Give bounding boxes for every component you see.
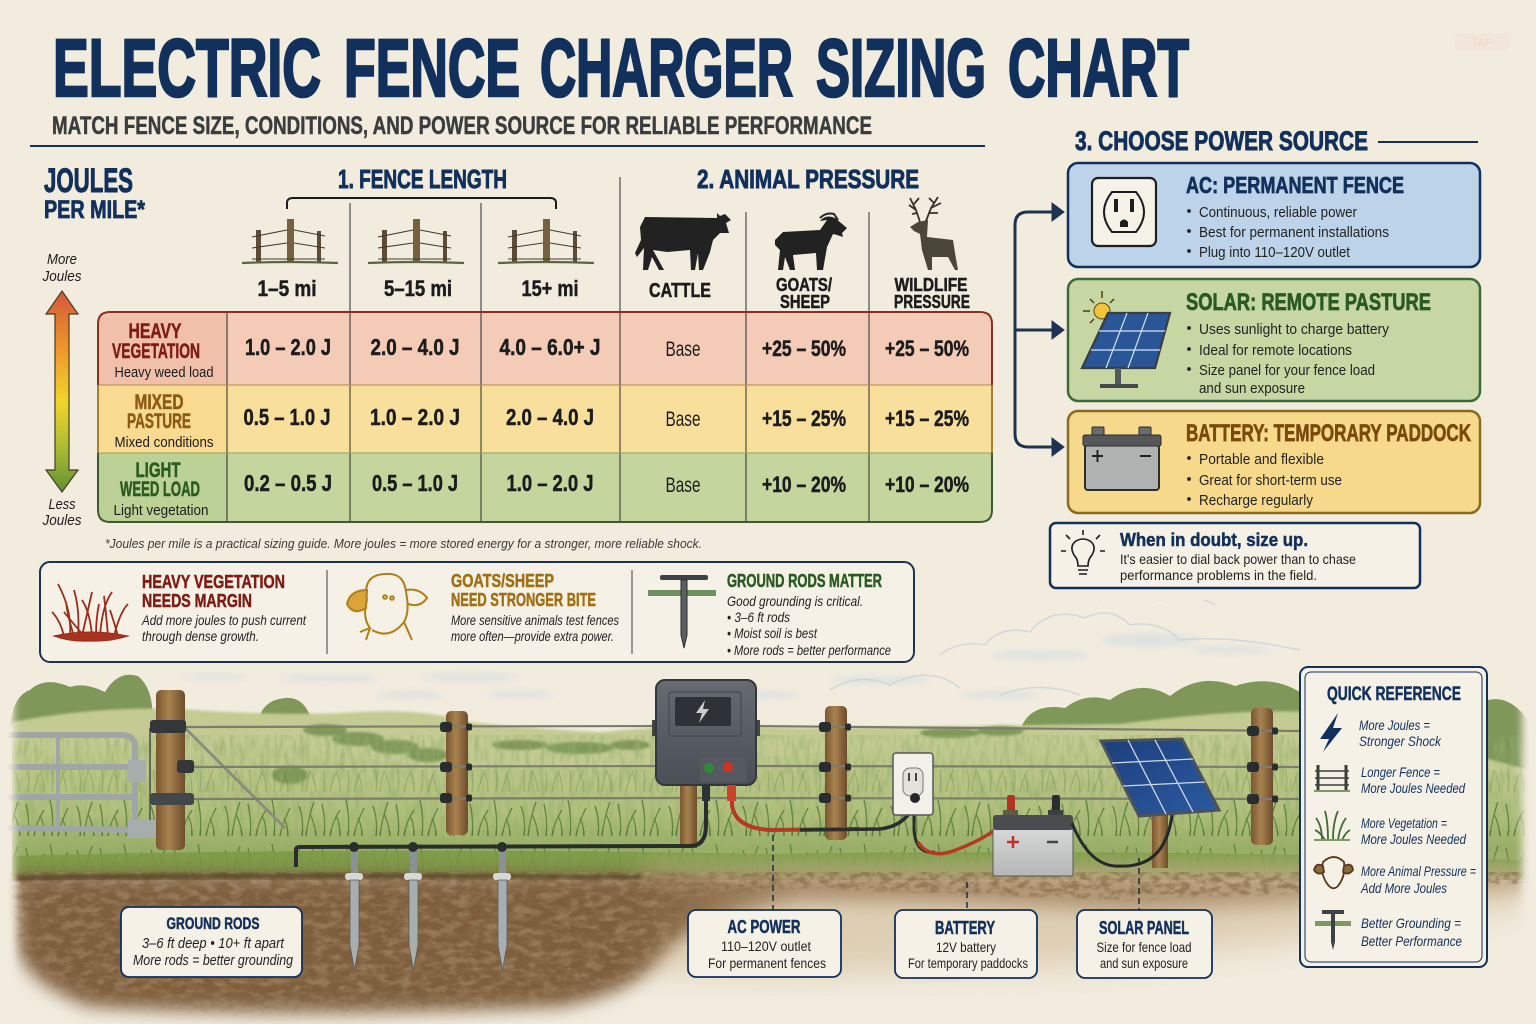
label: battery — [895, 910, 1037, 978]
panel: AC power: AC: PERMANENT FENCE — [1186, 172, 1404, 198]
row: light weed load — [114, 459, 969, 519]
icon: short fence — [242, 219, 338, 263]
panel: solar: Ideal for remote locations — [1199, 342, 1352, 359]
panel: quick reference: More Joules Needed — [1361, 780, 1466, 796]
row: heavy vegetation: +25 – 50% — [885, 336, 969, 361]
callout: when in doubt — [1050, 523, 1420, 588]
row: mixed pasture: 2.0 – 4.0 J — [506, 404, 594, 430]
label: solar panel — [1077, 910, 1212, 978]
panel: quick reference: More Vegetation = — [1361, 815, 1447, 831]
label: battery: BATTERY — [935, 918, 995, 938]
row: heavy vegetation: +25 – 50% — [762, 336, 846, 361]
arrows to power cards — [1015, 203, 1064, 456]
panel: quick reference: QUICK REFERENCE — [1327, 684, 1461, 705]
distant trees — [10, 674, 1528, 770]
ground rods — [345, 842, 511, 970]
icon: medium fence — [368, 219, 464, 263]
label: AC power — [688, 910, 841, 977]
panel: tips strip: NEEDS MARGIN — [142, 591, 252, 611]
panel: AC power — [1068, 163, 1480, 267]
left axis: joules per mile: Less — [48, 496, 76, 513]
row: heavy vegetation: 4.0 – 6.0+ J — [500, 334, 600, 360]
illustration: wall outlet — [893, 753, 933, 815]
ground wire — [294, 801, 708, 867]
icon: deer — [909, 197, 958, 270]
label: ground rods — [121, 907, 302, 977]
row: heavy vegetation: 2.0 – 4.0 J — [370, 334, 460, 360]
illustration: solar panel — [1072, 739, 1219, 866]
callout: when in doubt: It's easier to dial back power than to chase — [1120, 551, 1356, 567]
icon: light bulb — [1061, 530, 1105, 574]
panel: solar: and sun exposure — [1199, 380, 1305, 397]
title: SIZING — [816, 23, 986, 114]
left axis: joules per mile: More — [47, 251, 77, 268]
label: solar panel: SOLAR PANEL — [1099, 918, 1189, 938]
label: AC power: 110–120V outlet — [721, 938, 811, 954]
row: mixed pasture — [114, 391, 969, 451]
icon: goat — [775, 214, 847, 270]
left axis: joules per mile: JOULES — [44, 162, 133, 200]
gate — [8, 728, 156, 838]
panel: quick reference: More Joules = — [1359, 717, 1430, 733]
far hills — [12, 709, 1530, 880]
field — [12, 752, 1526, 880]
panel: tips strip: More sensitive animals test fences — [451, 612, 619, 628]
illustration: fence charger — [652, 680, 760, 801]
row: light weed load: 1.0 – 2.0 J — [506, 470, 594, 496]
fence brace — [185, 728, 285, 828]
row: mixed pasture: +15 – 25% — [762, 406, 846, 431]
header: animal pressure — [635, 164, 970, 312]
panel: quick reference: Longer Fence = — [1361, 764, 1440, 780]
row: heavy vegetation: Heavy weed load — [114, 364, 214, 381]
fence wires — [185, 726, 1300, 799]
header: fence length — [242, 164, 594, 301]
row: light weed load: +10 – 20% — [885, 472, 969, 497]
panel: tips strip — [40, 562, 914, 662]
scale arrow — [46, 291, 78, 492]
row: mixed pasture: +15 – 25% — [885, 406, 969, 431]
row: light weed load: 0.5 – 1.0 J — [372, 470, 458, 496]
panel: tips strip: • More rods = better performance — [727, 642, 891, 658]
row: light weed load: Base — [666, 474, 700, 497]
icon: sheep — [347, 574, 427, 640]
panel: quick reference: Better Performance — [1361, 933, 1462, 949]
faint watermark tag: TAP — [1472, 37, 1492, 49]
icon: ground rod — [1315, 910, 1351, 950]
panel: quick reference: More Animal Pressure = — [1361, 863, 1476, 879]
panel: quick reference: Better Grounding = — [1361, 915, 1461, 931]
icon: cow — [635, 213, 731, 270]
hillside tree lines — [272, 724, 1024, 784]
title: ELECTRIC — [53, 23, 321, 114]
icon: long fence — [498, 219, 594, 263]
header: fence length: 1–5 mi — [258, 276, 316, 301]
row: mixed pasture: 1.0 – 2.0 J — [370, 404, 460, 430]
header: animal pressure: PRESSURE — [894, 292, 970, 312]
icon: red grass — [52, 584, 128, 641]
grass tufts — [14, 830, 1524, 860]
header: animal pressure: WILDLIFE — [894, 275, 968, 295]
title: CHART — [1008, 23, 1189, 114]
panel: tips strip: through dense growth. — [142, 628, 259, 644]
clouds — [180, 595, 1300, 699]
label: AC power: AC POWER — [728, 917, 801, 937]
row: light weed load: WEED LOAD — [120, 478, 200, 501]
row: mixed pasture: MIXED — [134, 391, 184, 414]
header: fence length: 5–15 mi — [384, 276, 452, 301]
row: heavy vegetation: VEGETATION — [112, 340, 200, 363]
panel: quick reference: More Joules Needed — [1361, 831, 1467, 847]
row: light weed load: +10 – 20% — [762, 472, 846, 497]
icon: sheep head — [1314, 857, 1353, 888]
scene: pasture landscape — [0, 595, 1536, 1022]
label: ground rods: More rods = better grounding — [133, 953, 293, 969]
panel: tips strip: • 3–6 ft rods — [727, 609, 790, 625]
icon: lightning bolt — [1320, 713, 1342, 752]
header: animal pressure: 2. ANIMAL PRESSURE — [697, 164, 919, 194]
header: animal pressure: GOATS/ — [776, 275, 832, 295]
panel: battery: Portable and flexible — [1199, 451, 1324, 468]
panel: tips strip: more often—provide extra power. — [451, 628, 614, 644]
label: ground rods: 3–6 ft deep • 10+ ft apart — [142, 936, 285, 952]
fence posts — [156, 690, 1273, 868]
panel: solar: Uses sunlight to charge battery — [1199, 321, 1389, 338]
panel: solar: Size panel for your fence load — [1199, 362, 1375, 379]
panel: tips strip: Add more joules to push current — [141, 612, 307, 628]
icon: battery — [1083, 427, 1161, 490]
panel: quick reference: Add More Joules — [1360, 880, 1447, 896]
left axis: joules per mile — [42, 162, 145, 529]
icon: ground rod — [648, 575, 716, 648]
label: battery: 12V battery — [936, 939, 996, 955]
illustration: battery — [993, 795, 1073, 876]
row: heavy vegetation — [112, 320, 969, 381]
row: light weed load: LIGHT — [136, 459, 181, 482]
panel: tips strip: • Moist soil is best — [727, 625, 818, 641]
row: light weed load: 0.2 – 0.5 J — [244, 470, 332, 496]
label: solar panel: Size for fence load — [1096, 939, 1192, 955]
panel: AC power: Continuous, reliable power — [1199, 204, 1357, 221]
row: mixed pasture: Base — [666, 408, 700, 431]
icon: vegetation — [1314, 811, 1350, 840]
panel: battery: Recharge regularly — [1199, 492, 1313, 509]
sizing table — [98, 177, 992, 522]
panel: quick reference — [1300, 667, 1487, 967]
subtitle: MATCH FENCE SIZE, CONDITIONS, AND POWER SOURCE FOR RELIABLE PERFORMANCE — [52, 112, 872, 140]
panel: tips strip: Good grounding is critical. — [727, 593, 863, 609]
footnote: *Joules per mile is a practical sizing guide. More joules = more stored energy for a stronger, more reliable shock. — [105, 536, 702, 551]
red power cable — [732, 795, 860, 830]
left axis: joules per mile: Joules — [42, 268, 82, 285]
title: CHARGER — [540, 23, 793, 114]
left axis: joules per mile: Joules — [42, 512, 82, 529]
panel: tips strip: NEED STRONGER BITE — [451, 590, 596, 610]
icon: wall outlet — [1092, 178, 1156, 246]
panel: battery — [1068, 411, 1480, 513]
left axis: joules per mile: PER MILE* — [44, 196, 145, 224]
dashed leader lines — [773, 835, 1139, 910]
icon: solar panel with sun — [1082, 291, 1170, 386]
header: animal pressure: SHEEP — [780, 292, 830, 312]
panel: battery: Great for short-term use — [1199, 472, 1342, 489]
insulators — [150, 720, 1278, 805]
label: ground rods: GROUND RODS — [166, 914, 260, 933]
label: solar panel: and sun exposure — [1100, 955, 1188, 971]
soil — [0, 872, 1536, 1022]
table grid — [227, 177, 869, 522]
panel: solar — [1068, 279, 1480, 401]
icon: fence — [1314, 765, 1350, 791]
panel: AC power: Best for permanent installations — [1199, 224, 1389, 241]
row: heavy vegetation: Base — [666, 338, 700, 361]
panel: tips strip: GROUND RODS MATTER — [727, 571, 882, 591]
panel: solar: SOLAR: REMOTE PASTURE — [1186, 289, 1431, 316]
faint watermark tag — [1455, 33, 1510, 50]
title — [53, 23, 1189, 114]
panel: tips strip: GOATS/SHEEP — [451, 571, 554, 591]
row: mixed pasture: Mixed conditions — [114, 434, 214, 451]
power source heading: 3. CHOOSE POWER SOURCE — [1075, 126, 1368, 156]
header: fence length: 15+ mi — [522, 276, 578, 301]
panel: AC power: Plug into 110–120V outlet — [1199, 244, 1351, 261]
title: FENCE — [344, 23, 520, 114]
row: mixed pasture: 0.5 – 1.0 J — [244, 404, 330, 430]
label: AC power: For permanent fences — [708, 955, 826, 971]
label: battery: For temporary paddocks — [908, 955, 1028, 971]
row: mixed pasture: PASTURE — [127, 410, 191, 433]
panel: quick reference: Stronger Shock — [1359, 733, 1442, 749]
panel: tips strip: HEAVY VEGETATION — [142, 572, 285, 592]
row: light weed load: Light vegetation — [114, 502, 208, 519]
table rows — [98, 312, 992, 385]
callout: when in doubt: When in doubt, size up. — [1120, 530, 1308, 550]
header: animal pressure: CATTLE — [649, 280, 711, 302]
row: heavy vegetation: 1.0 – 2.0 J — [245, 334, 331, 360]
callout: when in doubt: performance problems in the field. — [1120, 567, 1317, 583]
header: fence length: 1. FENCE LENGTH — [338, 164, 507, 194]
row: heavy vegetation: HEAVY — [128, 320, 182, 343]
